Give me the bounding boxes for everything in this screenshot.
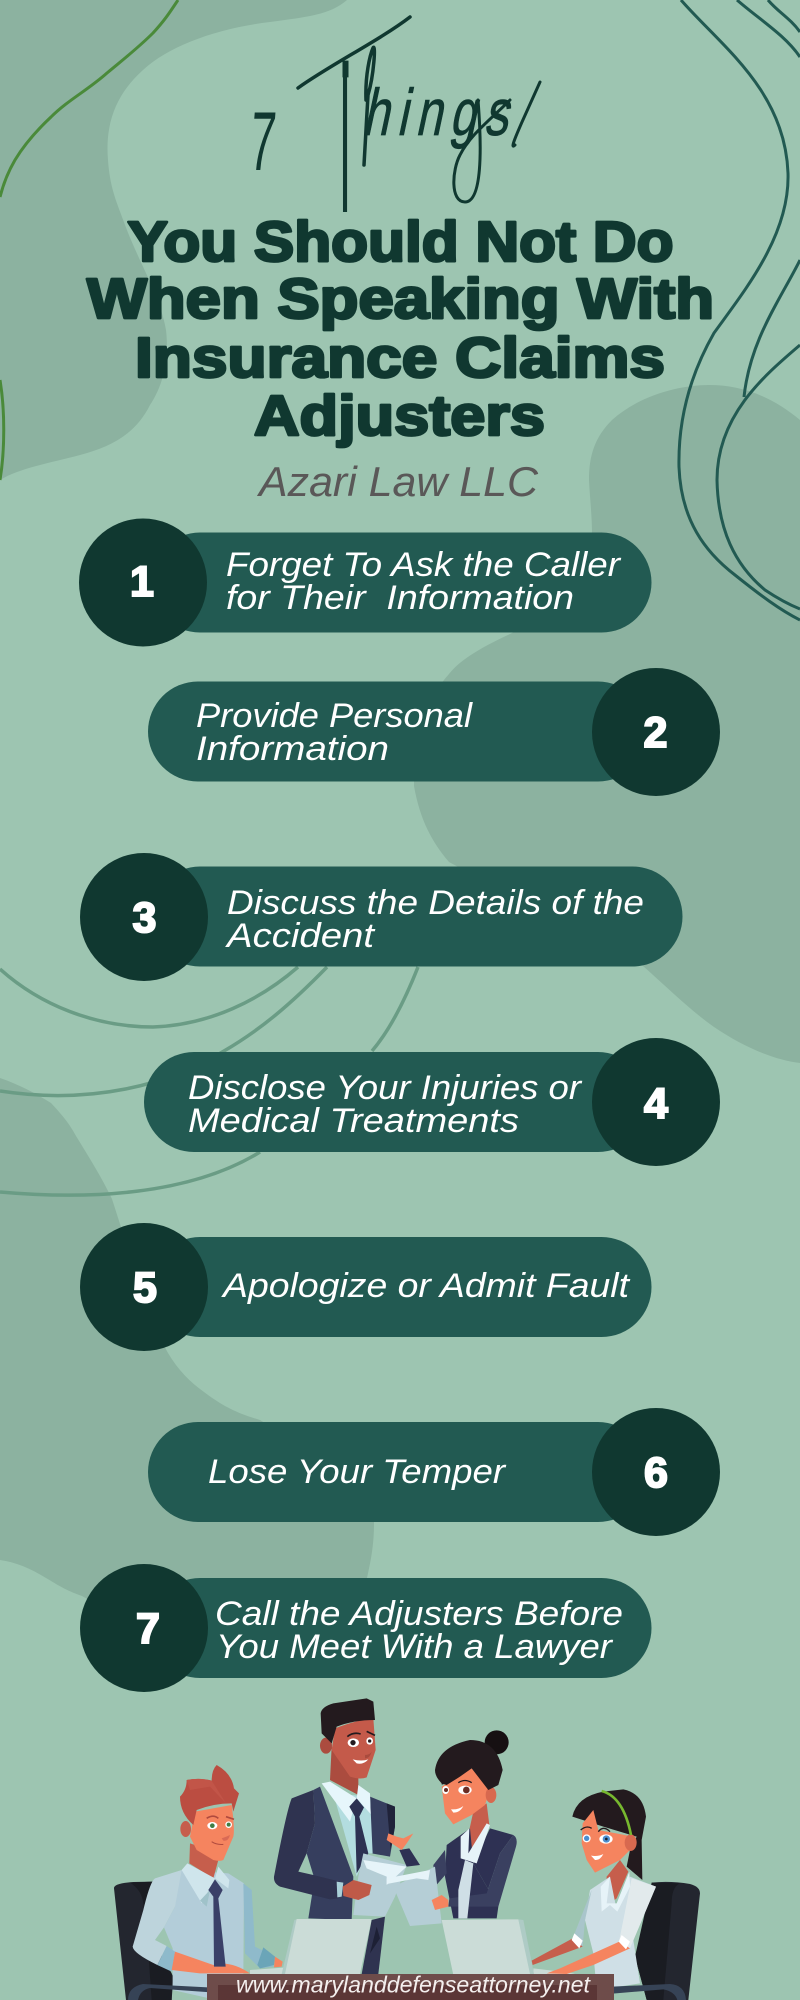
item 5 — [80, 1223, 652, 1351]
title: 7 Things script — [254, 15, 542, 212]
right two people — [387, 1730, 700, 2000]
website banner: www.marylanddefenseattorney.net — [236, 1972, 592, 1998]
item 5: 5 — [133, 1264, 157, 1312]
item 7: You Meet With a Lawyer — [216, 1628, 614, 1666]
item 4: Medical Treatments — [188, 1102, 519, 1140]
item 5: Apologize or Admit Fault — [221, 1267, 631, 1305]
title: heading: When Speaking With — [87, 267, 714, 331]
script numeral 7: 7 — [247, 96, 279, 189]
man in suit — [274, 1698, 407, 1974]
item 7 — [80, 1564, 652, 1692]
left chair arm — [128, 1984, 220, 2000]
item 7: 7 — [136, 1605, 160, 1653]
item 2: 2 — [644, 709, 667, 757]
man with red hair — [133, 1765, 283, 2000]
item 2 — [148, 668, 720, 796]
chair right — [635, 1882, 700, 2000]
item 1: for Their Information — [226, 579, 574, 617]
left two people — [114, 1698, 407, 2000]
chair left — [114, 1882, 173, 2000]
item 1: 1 — [130, 558, 154, 606]
script word Things — [296, 15, 542, 212]
item 3: Accident — [225, 917, 376, 955]
item 7: Call the Adjusters Before — [215, 1595, 623, 1633]
item 6: 6 — [644, 1449, 668, 1497]
subtitle: firm name: Azari Law LLC — [256, 458, 539, 505]
woman with hair bun — [387, 1730, 517, 1926]
item 4: Disclose Your Injuries or — [188, 1069, 583, 1107]
laptop right — [442, 1919, 575, 1977]
item 6 — [148, 1408, 720, 1536]
item 1: Forget To Ask the Caller — [226, 546, 622, 584]
item 3: Discuss the Details of the — [227, 884, 644, 922]
item 1 — [79, 518, 652, 646]
script word Things: T — [332, 12, 358, 259]
title: heading: Adjusters — [254, 384, 545, 448]
title: heading — [87, 210, 714, 448]
title: heading: Insurance Claims — [135, 326, 665, 390]
woman with green headband — [532, 1789, 686, 2000]
item 3: 3 — [133, 894, 156, 942]
item 6: Lose Your Temper — [208, 1453, 507, 1491]
laptop left — [250, 1919, 372, 1977]
title: heading: You Should Not Do — [128, 210, 674, 274]
illustration: business team at a table — [114, 1698, 700, 2000]
script word Things: hings — [359, 76, 528, 150]
item 4: 4 — [644, 1080, 668, 1128]
item 4 — [144, 1038, 720, 1166]
item 2: Provide Personal — [196, 697, 474, 735]
decorative line work — [0, 0, 800, 1195]
item 2: Information — [196, 730, 389, 768]
item 3 — [80, 853, 682, 981]
